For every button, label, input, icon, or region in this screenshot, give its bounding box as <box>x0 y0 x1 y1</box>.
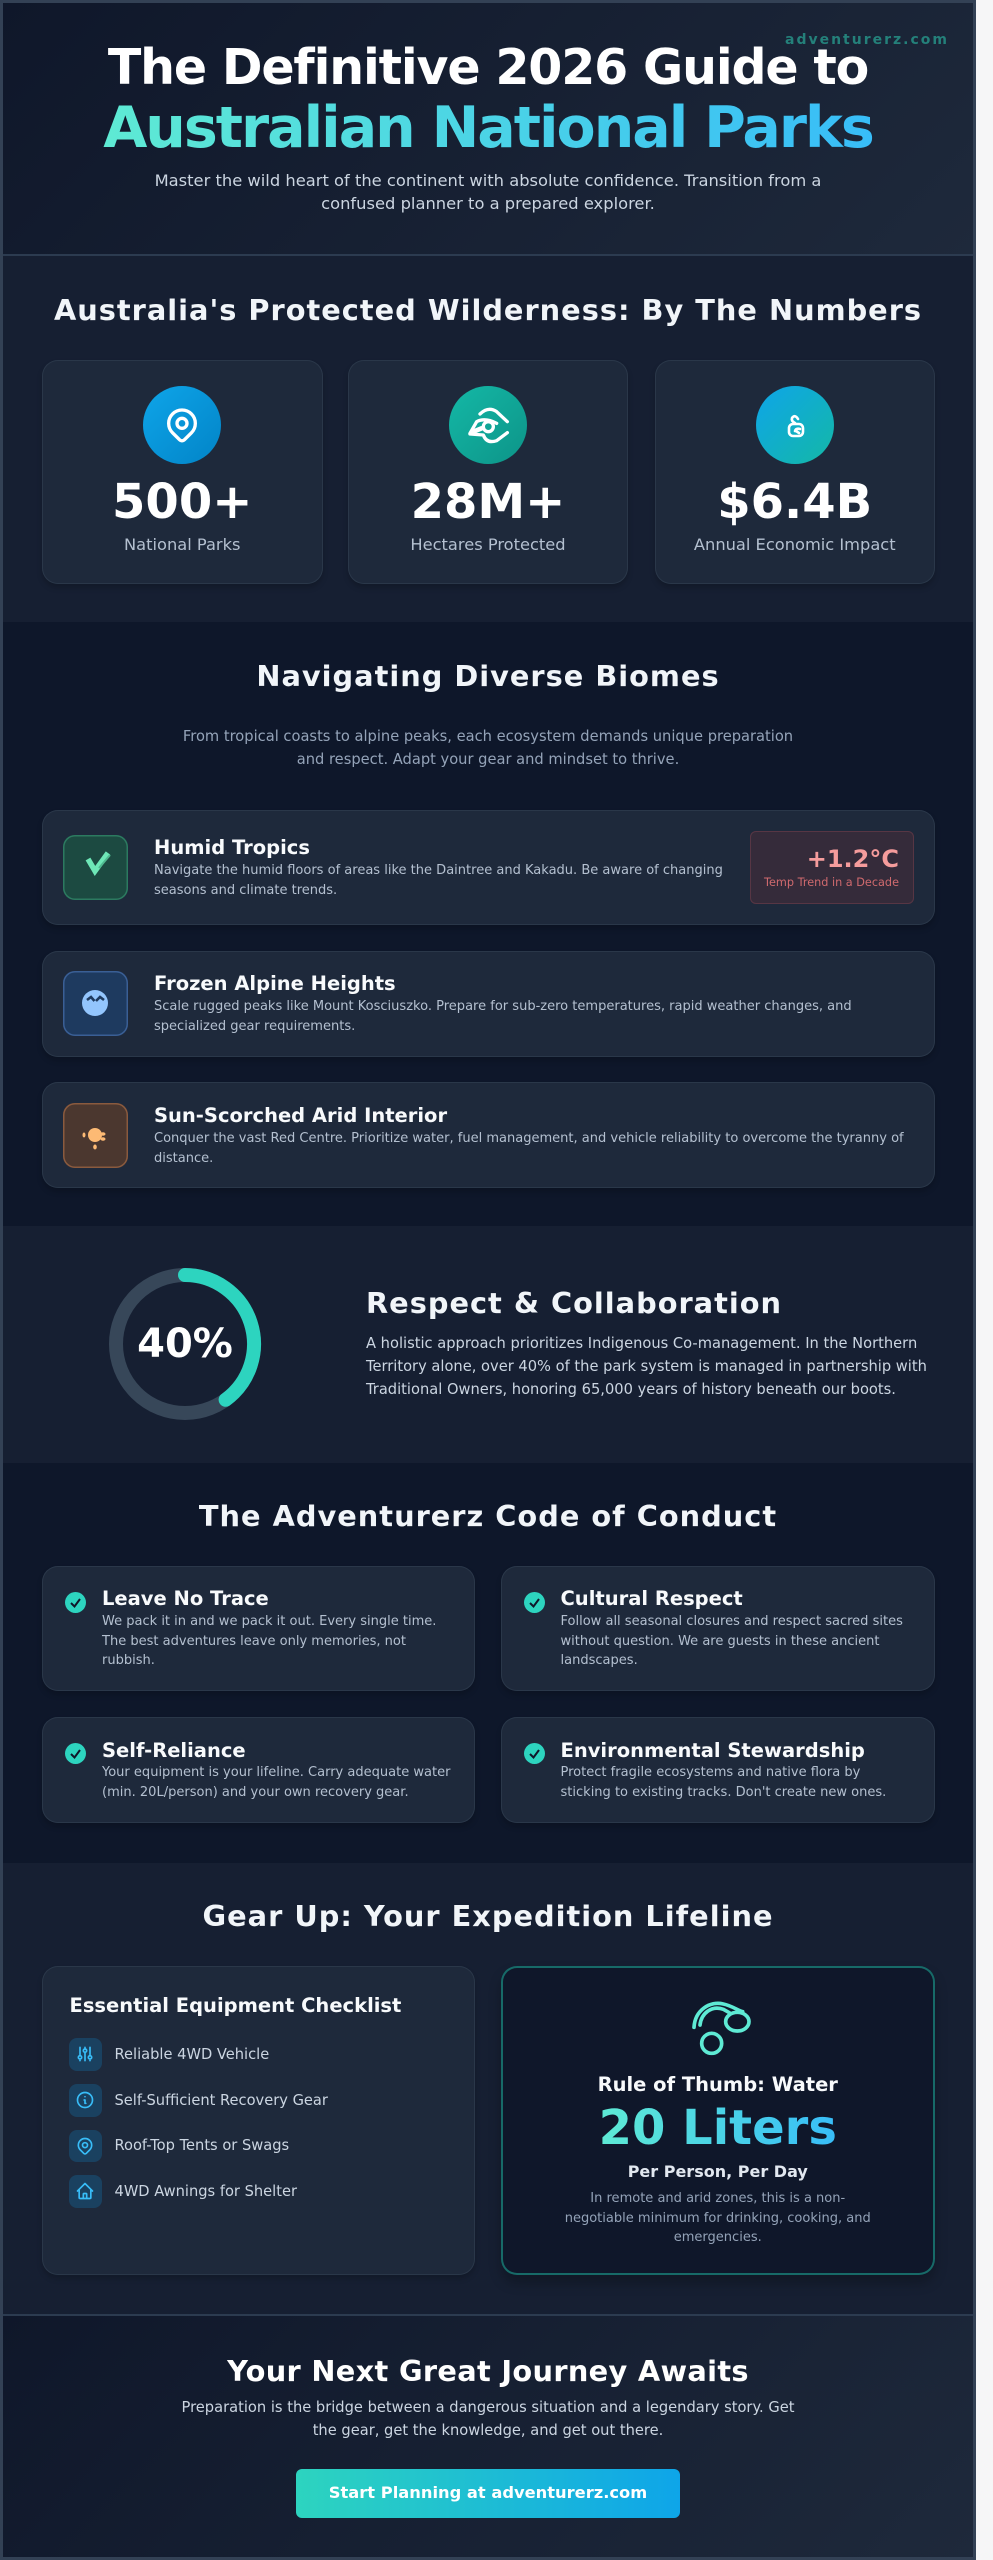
checklist item: recovery gear <box>69 2084 328 2117</box>
description <box>102 1765 450 1800</box>
icon: sun <box>63 1103 128 1168</box>
description: seasons and climate trends. <box>154 882 337 898</box>
panel: by the numbers <box>3 256 973 622</box>
description: Conquer the vast Red Centre. Prioritize water, fuel management, and vehicle reliability to overcome the tyranny of <box>154 1131 904 1146</box>
checklist item: vehicle <box>69 2038 269 2071</box>
intro text: From tropical coasts to alpine peaks, each ecosystem demands unique preparation <box>183 728 793 745</box>
icon: pin <box>69 2130 102 2162</box>
rule card: environmental stewardship <box>501 1717 934 1823</box>
temperature value: +1.2°C <box>807 845 899 873</box>
description <box>154 863 723 898</box>
icon: map pin <box>143 386 221 464</box>
watermark: adventurerz.com <box>785 32 949 48</box>
description: rubbish. <box>102 1653 155 1668</box>
heading: Respect & Collaboration <box>366 1286 782 1320</box>
panel: biomes <box>3 622 973 1226</box>
rule card: self-reliance <box>42 1717 475 1823</box>
icon: check <box>524 1592 545 1613</box>
description: sticking to existing tracks. Don't create new ones. <box>560 1784 886 1800</box>
intro text <box>183 728 793 768</box>
heading: Gear Up: Your Expedition Lifeline <box>203 1899 773 1933</box>
description: specialized gear requirements. <box>154 1018 355 1034</box>
icon: info <box>69 2084 102 2116</box>
description: landscapes. <box>560 1653 638 1668</box>
stat card: hectares <box>348 360 628 584</box>
button label: Start Planning at adventurerz.com <box>329 2483 647 2502</box>
description <box>154 1131 904 1166</box>
panel: gear up <box>3 1863 973 2314</box>
label: Annual Economic Impact <box>694 535 896 554</box>
icon: home <box>69 2175 102 2208</box>
callout description: negotiable minimum for drinking, cooking, and <box>565 2210 871 2226</box>
icon: water <box>692 2002 751 2056</box>
equipment checklist card <box>42 1966 475 2275</box>
icon: check <box>524 1743 545 1764</box>
item text: Self-Sufficient Recovery Gear <box>114 2092 328 2108</box>
title: Environmental Stewardship <box>560 1739 865 1762</box>
icon: check <box>65 1592 86 1613</box>
title: Sun-Scorched Arid Interior <box>154 1104 447 1127</box>
panel: header <box>3 3 973 256</box>
paragraph <box>182 2399 794 2439</box>
callout description: emergencies. <box>674 2230 762 2245</box>
subtitle: Master the wild heart of the continent with absolute confidence. Transition from a <box>155 171 821 190</box>
callout description: In remote and arid zones, this is a non- <box>590 2191 845 2206</box>
title: The Definitive 2026 Guide to <box>108 39 868 96</box>
label: National Parks <box>124 535 240 554</box>
stat card: national parks <box>42 360 322 584</box>
heading: The Adventurerz Code of Conduct <box>199 1499 777 1533</box>
ring value: 40% <box>137 1321 233 1367</box>
description: (min. 20L/person) and your own recovery gear. <box>102 1784 409 1800</box>
heading: Navigating Diverse Biomes <box>256 659 720 693</box>
biome card: alpine <box>42 951 934 1056</box>
icon: check <box>65 1743 86 1764</box>
description: without question. We are guests in these ancient <box>560 1634 879 1648</box>
description: Protect fragile ecosystems and native flora by <box>560 1765 860 1780</box>
panel: call to action <box>3 2314 973 2557</box>
temperature callout <box>750 831 914 904</box>
callout title: Rule of Thumb: Water <box>598 2073 838 2096</box>
number: 28M+ <box>411 474 565 530</box>
rule card: leave no trace <box>42 1566 475 1691</box>
big number: 20 Liters <box>599 2100 837 2156</box>
paragraph: A holistic approach prioritizes Indigenous Co-management. In the Northern <box>366 1335 917 1352</box>
stat card: economic impact <box>654 360 935 584</box>
description: Follow all seasonal closures and respect sacred sites <box>560 1614 903 1629</box>
title: Humid Tropics <box>154 836 310 859</box>
panel: respect and collaboration <box>3 1226 973 1463</box>
paragraph <box>366 1335 927 1398</box>
paragraph: Preparation is the bridge between a dangerous situation and a legendary story. Get <box>182 2399 794 2416</box>
description <box>154 999 852 1034</box>
checklist item: tents <box>69 2130 289 2162</box>
description: Scale rugged peaks like Mount Kosciuszko. Prepare for sub-zero temperatures, rapid weather changes, and <box>154 999 852 1014</box>
title: Leave No Trace <box>102 1587 269 1610</box>
rule card: cultural respect <box>501 1566 934 1691</box>
heading: Your Next Great Journey Awaits <box>227 2354 749 2388</box>
heading: Australia's Protected Wilderness: By The Numbers <box>54 293 922 327</box>
icon: globe <box>449 386 527 464</box>
description: Navigate the humid floors of areas like the Daintree and Kakadu. Be aware of changing <box>154 863 723 878</box>
paragraph: Territory alone, over 40% of the park system is managed in partnership with <box>366 1358 927 1375</box>
callout subtitle: Per Person, Per Day <box>628 2162 808 2181</box>
callout description <box>565 2191 871 2245</box>
paragraph: Traditional Owners, honoring 65,000 years of history beneath our boots. <box>366 1381 896 1398</box>
description: The best adventures leave only memories, not <box>102 1634 406 1648</box>
intro text: and respect. Adapt your gear and mindset to thrive. <box>297 751 679 768</box>
subtitle: confused planner to a prepared explorer. <box>321 194 655 213</box>
checklist title: Essential Equipment Checklist <box>70 1994 401 2017</box>
label: Hectares Protected <box>410 535 566 554</box>
subtitle <box>155 171 821 213</box>
paragraph: the gear, get the knowledge, and get out there. <box>313 2422 663 2439</box>
biome card: arid <box>42 1082 934 1188</box>
icon: tropics check <box>63 835 128 900</box>
title: Cultural Respect <box>560 1587 743 1610</box>
item text: Reliable 4WD Vehicle <box>114 2046 269 2062</box>
icon: alpine <box>63 971 128 1036</box>
panel: code of conduct <box>3 1463 973 1863</box>
description: distance. <box>154 1150 213 1166</box>
temperature caption: Temp Trend in a Decade <box>764 876 899 889</box>
description: We pack it in and we pack it out. Every single time. <box>102 1614 436 1629</box>
ring chart: 40 percent <box>109 1268 262 1420</box>
button <box>296 2469 680 2518</box>
description <box>102 1614 436 1668</box>
number: $6.4B <box>717 474 872 530</box>
title: Self-Reliance <box>102 1739 246 1762</box>
number: 500+ <box>112 474 252 530</box>
item text: Roof-Top Tents or Swags <box>114 2137 289 2154</box>
title highlight: Australian National Parks <box>103 95 873 161</box>
description: Your equipment is your lifeline. Carry adequate water <box>102 1765 450 1780</box>
title: Frozen Alpine Heights <box>154 972 396 995</box>
biome card: humid tropics <box>42 810 934 925</box>
icon: money bag <box>756 386 834 464</box>
water rule callout <box>501 1966 934 2275</box>
icon: sliders <box>69 2038 102 2070</box>
item text: 4WD Awnings for Shelter <box>114 2182 297 2200</box>
description <box>560 1614 903 1668</box>
checklist item: awnings <box>69 2175 297 2208</box>
description <box>560 1765 886 1800</box>
